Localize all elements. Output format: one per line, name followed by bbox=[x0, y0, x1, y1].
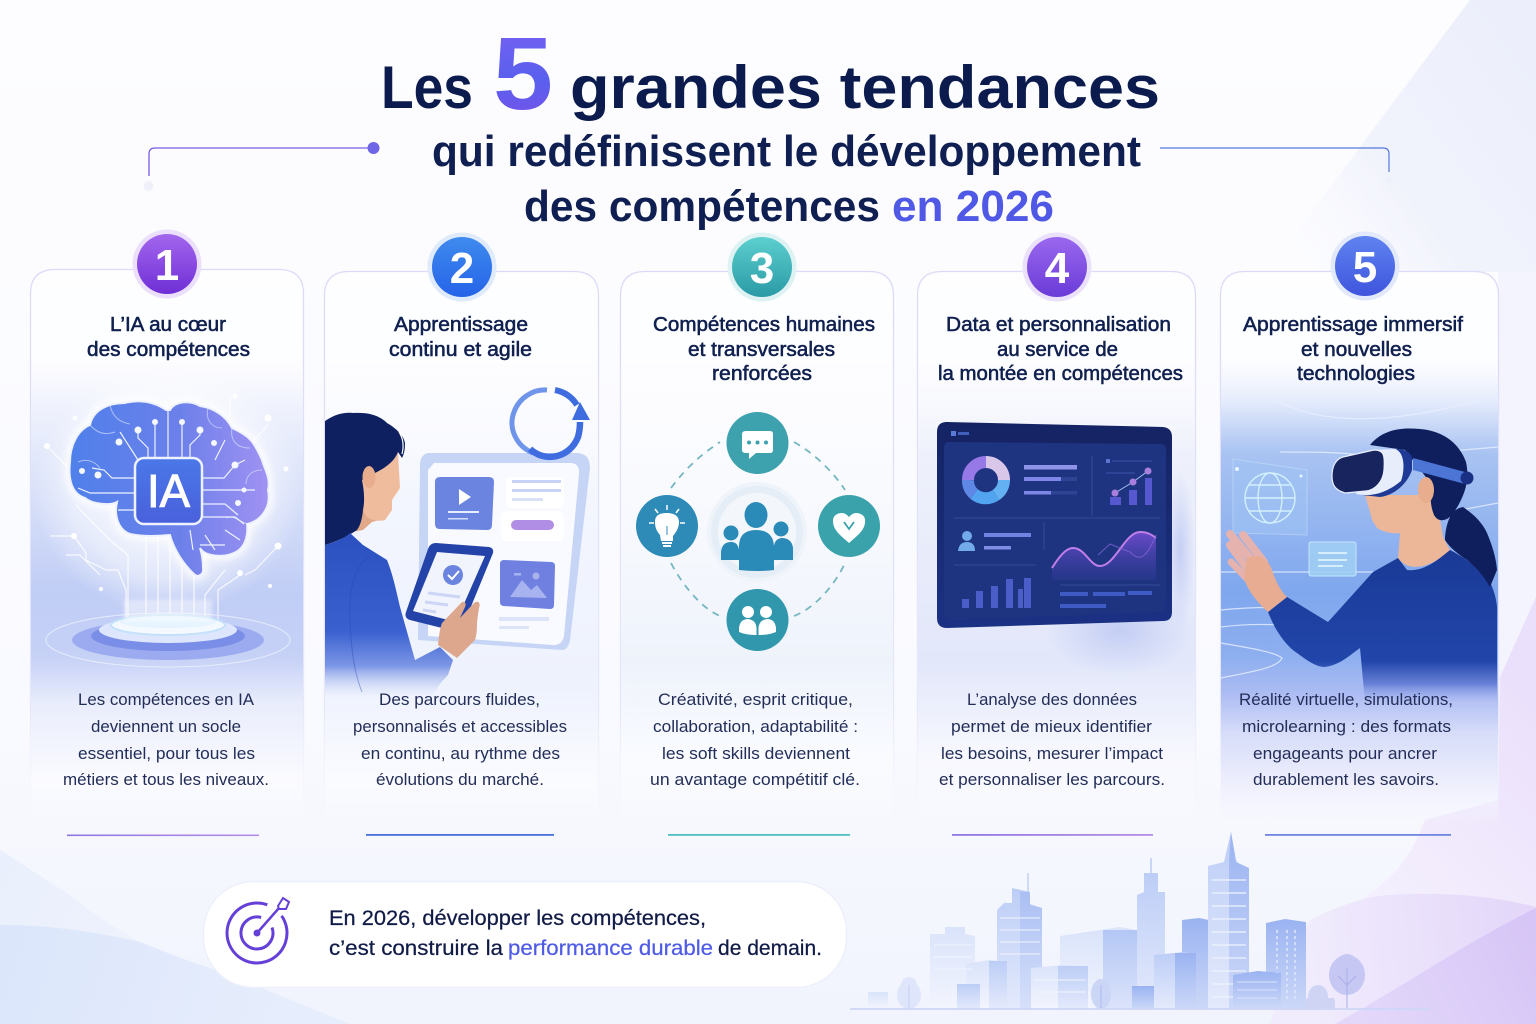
hair bbox=[1370, 428, 1467, 520]
badge 5 bbox=[1330, 232, 1400, 300]
IA chip: IA bbox=[147, 465, 190, 517]
ponytail bbox=[1445, 507, 1497, 587]
body text 4: permet de mieux identifier bbox=[951, 718, 1153, 736]
learner figure bbox=[325, 413, 453, 695]
heading 5: Apprentissage immersif bbox=[1243, 314, 1463, 336]
callout text: de demain. bbox=[718, 936, 822, 960]
body text 2 bbox=[353, 691, 567, 789]
heading 4: la montée en compétences bbox=[938, 363, 1183, 385]
badge 5: 5 bbox=[1353, 243, 1377, 292]
card 1 frame bbox=[30, 270, 304, 824]
badge 2 bbox=[428, 232, 496, 302]
badge 3: 3 bbox=[750, 244, 774, 293]
title: Les bbox=[381, 54, 473, 121]
subtitle accent: en 2026 bbox=[892, 182, 1054, 231]
body text 5: microlearning : des formats bbox=[1242, 718, 1451, 736]
subtitle line 2: des compétences bbox=[524, 182, 880, 231]
area line chart bbox=[1052, 532, 1156, 580]
heading 3: renforcées bbox=[712, 363, 812, 385]
handheld tablet bbox=[406, 543, 493, 631]
headset bbox=[1332, 449, 1474, 497]
body text 4: les besoins, mesurer l’impact bbox=[941, 745, 1163, 763]
icon: lightbulb bbox=[636, 495, 698, 557]
floating text panel bbox=[1309, 542, 1356, 576]
panel: card 2 bbox=[324, 232, 598, 836]
dashed ring bbox=[671, 442, 845, 616]
panel: card 5 bbox=[1220, 232, 1498, 836]
panel: card 1 bbox=[30, 230, 304, 836]
heading 3 bbox=[653, 314, 875, 385]
mini bar and line chart bbox=[1106, 459, 1152, 505]
body text 2: Des parcours fluides, bbox=[379, 691, 540, 709]
city skyline bbox=[850, 832, 1430, 1010]
card 3 frame bbox=[620, 272, 894, 824]
heading 5: technologies bbox=[1297, 363, 1415, 385]
badge 4 bbox=[1022, 232, 1092, 302]
content board bbox=[418, 453, 590, 650]
title main line: grandes tendances bbox=[570, 54, 1160, 121]
subtitle line 1: qui redéfinissent le développement bbox=[432, 127, 1141, 176]
icon: two people bbox=[726, 589, 788, 651]
heading 3: et transversales bbox=[688, 339, 835, 361]
skin: face and neck bbox=[1365, 495, 1450, 567]
body text 2: personnalisés et accessibles bbox=[353, 718, 567, 736]
right connector bbox=[1160, 148, 1393, 184]
card 4 illustration: data dashboard bbox=[918, 360, 1195, 825]
card 5 illustration: immersive VR bbox=[1221, 360, 1498, 825]
body text 3: un avantage compétitif clé. bbox=[650, 771, 860, 789]
hand bbox=[438, 602, 480, 658]
body text 1 bbox=[63, 691, 269, 789]
user summary bbox=[958, 531, 1031, 551]
sweater bbox=[1268, 550, 1497, 702]
big number 5: 5 bbox=[493, 16, 553, 131]
callout bbox=[204, 882, 846, 988]
body text 1: deviennent un socle bbox=[91, 718, 241, 736]
heading 1: L’IA au cœur bbox=[110, 314, 226, 336]
raised hand bbox=[1230, 534, 1287, 612]
holographic platform bbox=[46, 600, 290, 667]
heading 5 bbox=[1243, 314, 1463, 385]
heading 4 bbox=[938, 314, 1183, 385]
heading 3: Compétences humaines bbox=[653, 314, 875, 336]
left connector bbox=[144, 142, 380, 191]
body text 5: engageants pour ancrer bbox=[1253, 745, 1438, 763]
floating globe panel bbox=[1233, 459, 1307, 535]
heading 1 bbox=[87, 314, 250, 361]
dashboard screen bbox=[937, 422, 1172, 628]
heading 4: au service de bbox=[997, 339, 1118, 361]
callout text: performance durable bbox=[508, 936, 713, 960]
card 5 frame bbox=[1220, 272, 1498, 824]
panel: card 3 bbox=[620, 232, 894, 836]
body text 5 bbox=[1239, 691, 1453, 789]
icon: heart bbox=[818, 495, 880, 557]
callout text: En 2026, développer les compétences, bbox=[329, 906, 706, 930]
badge 4: 4 bbox=[1045, 244, 1070, 293]
body text 5: durablement les savoirs. bbox=[1253, 771, 1439, 789]
card 2 frame bbox=[324, 272, 598, 824]
heading 2 bbox=[389, 314, 532, 361]
body text 4: et personnaliser les parcours. bbox=[939, 771, 1165, 789]
body text 1: métiers et tous les niveaux. bbox=[63, 771, 269, 789]
body text 1: essentiel, pour tous les bbox=[78, 745, 255, 763]
body text 3: Créativité, esprit critique, bbox=[658, 691, 853, 709]
icon: target with arrow bbox=[227, 898, 289, 963]
card 1 illustration: AI brain bbox=[31, 360, 303, 825]
body text 4: L’analyse des données bbox=[967, 691, 1137, 709]
IA chip bbox=[135, 458, 202, 524]
body text 4 bbox=[939, 691, 1165, 789]
heading 5: et nouvelles bbox=[1301, 339, 1412, 361]
heading 1: des compétences bbox=[87, 339, 250, 361]
body text 2: en continu, au rythme des bbox=[361, 745, 560, 763]
badge 1: 1 bbox=[155, 241, 179, 290]
body text 3: collaboration, adaptabilité : bbox=[653, 718, 858, 736]
callout text bbox=[329, 906, 822, 960]
callout text: c’est construire la bbox=[329, 936, 503, 960]
body text 5: Réalité virtuelle, simulations, bbox=[1239, 691, 1453, 709]
badge 1 bbox=[132, 230, 202, 298]
card 2 illustration: learner and content bbox=[325, 360, 598, 825]
icon: cycle arrow bbox=[512, 390, 590, 457]
icon: speech bubble bbox=[726, 412, 788, 474]
title bbox=[381, 16, 1160, 231]
body text 3: les soft skills deviennent bbox=[662, 745, 850, 763]
badge 2: 2 bbox=[450, 244, 474, 293]
panel: card 4 bbox=[918, 232, 1196, 836]
bar chart bbox=[962, 578, 1031, 608]
centre team bbox=[707, 482, 807, 582]
badge 3 bbox=[728, 232, 796, 302]
body text 1: Les compétences en IA bbox=[78, 691, 254, 709]
body text 2: évolutions du marché. bbox=[376, 771, 544, 789]
heading 2: Apprentissage bbox=[394, 314, 528, 336]
body text 3 bbox=[650, 691, 860, 789]
card 3 illustration: human skills bbox=[621, 360, 893, 825]
card 4 frame bbox=[918, 272, 1196, 824]
heading 2: continu et agile bbox=[389, 339, 532, 361]
donut chart bbox=[968, 462, 1004, 498]
heading 4: Data et personnalisation bbox=[946, 314, 1171, 336]
